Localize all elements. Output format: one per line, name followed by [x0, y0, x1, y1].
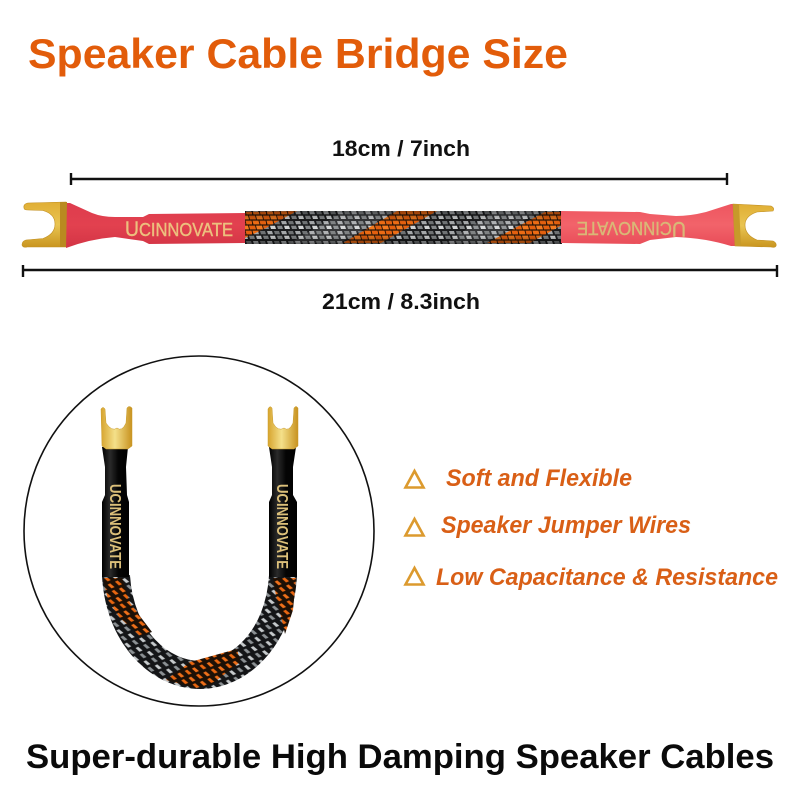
U-shaped cable [101, 406, 298, 688]
feature: soft and flexible: Soft and Flexible [446, 465, 632, 492]
feature: low capacitance and resistance: Low Capacitance & Resistance [436, 564, 778, 591]
orange braid band: right [273, 578, 296, 634]
dimension line: 18cm [71, 173, 727, 185]
left sleeve brand text: UCINNOVATE [125, 218, 233, 241]
dimension line: 21cm [23, 265, 777, 277]
straight cable [22, 202, 776, 248]
left spade terminal [22, 202, 67, 247]
braided loop [116, 576, 283, 675]
orange braid band: left [103, 578, 152, 636]
orange braid band: bottom [166, 649, 240, 688]
orange braid band 1 [245, 211, 297, 238]
feature: speaker jumper wires: Speaker Jumper Wires [441, 512, 691, 539]
left red sleeve [66, 203, 246, 248]
label: 18cm / 7inch: 18cm / 7inch [332, 136, 470, 161]
right spade terminal [733, 204, 776, 247]
right spade [268, 406, 298, 449]
label: 21cm / 8.3inch: 21cm / 8.3inch [322, 289, 480, 314]
title: Speaker Cable Bridge Size [28, 30, 568, 77]
left brand text: UCINNOVATE [106, 484, 123, 569]
orange braid band 2 [343, 211, 437, 243]
orange braid band 3 [487, 212, 562, 243]
right black sleeve [269, 447, 297, 577]
braid highlights [290, 211, 540, 243]
right brand text: UCINNOVATE [273, 484, 290, 569]
right sleeve brand text (upside down): UCINNOVATE [577, 217, 686, 240]
left black sleeve [102, 447, 129, 577]
feature list [406, 465, 778, 591]
braided section [245, 211, 562, 244]
circle frame [24, 356, 374, 706]
footer heading: Super-durable High Damping Speaker Cables [26, 738, 774, 776]
right red sleeve [561, 204, 736, 246]
left spade [101, 406, 132, 449]
